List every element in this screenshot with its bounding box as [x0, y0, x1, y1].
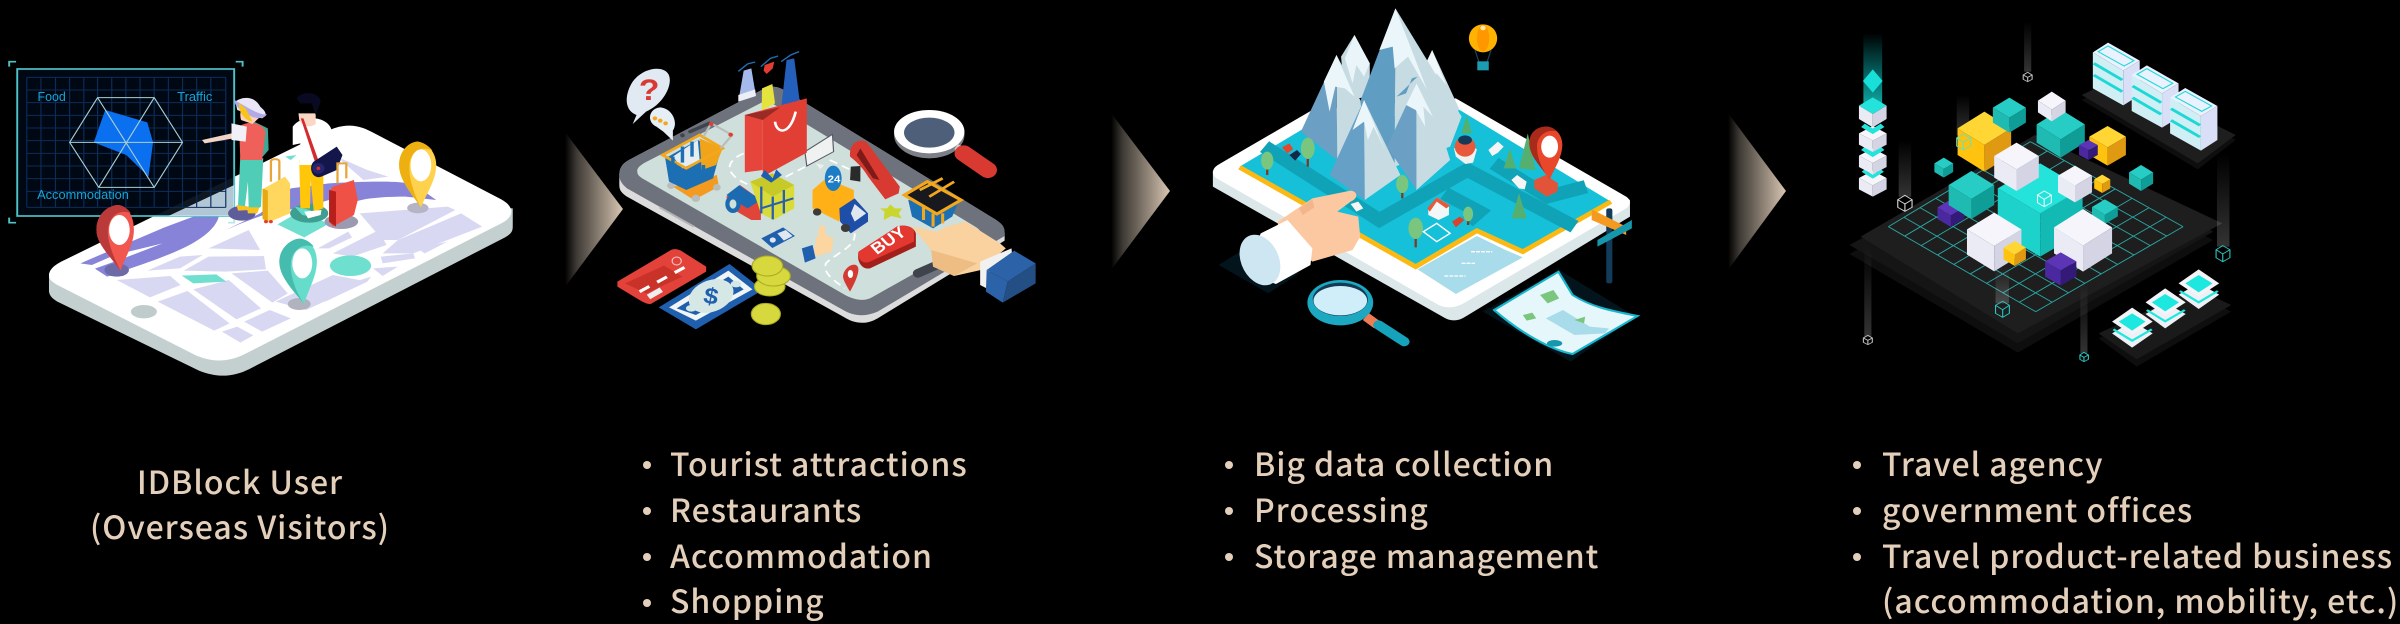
list: data handling	[1225, 440, 1599, 578]
monitor	[805, 134, 834, 169]
location pin and shop	[1529, 127, 1562, 197]
credit card	[617, 249, 706, 304]
delivery truck: 24	[828, 174, 840, 185]
front mountain	[1330, 100, 1400, 200]
label: Food: Food	[37, 90, 66, 104]
text: IDBlock User	[90, 458, 390, 549]
trees	[1261, 116, 1535, 247]
shelf: bottom platform	[2099, 288, 2231, 367]
water	[1418, 236, 1523, 294]
cube cluster	[1934, 92, 2153, 286]
basket	[904, 178, 961, 228]
suitcase: red	[324, 163, 358, 229]
radar chart	[70, 98, 183, 187]
map blocks	[117, 157, 482, 343]
speech bubble: dots	[650, 107, 675, 141]
list: places: Restaurants	[670, 486, 862, 532]
hand with sleeve	[1233, 191, 1360, 290]
magnifier	[1307, 280, 1404, 342]
illustration: tablet with mountain island	[1213, 8, 1638, 362]
left mountain	[1301, 55, 1368, 160]
river	[80, 207, 219, 277]
phone body	[619, 87, 1005, 323]
list: places: Accommodation	[670, 532, 933, 578]
illustration: shopping phone	[617, 52, 1036, 329]
list: data handling: Big data collection	[1254, 440, 1554, 486]
traveller: woman	[202, 98, 269, 221]
banknote	[659, 264, 763, 329]
roads	[1265, 147, 1586, 227]
dashed route	[730, 153, 855, 288]
shelf: servers platform	[2082, 77, 2236, 169]
storage units	[2112, 269, 2219, 348]
grid	[1888, 142, 2183, 312]
list: data consumers: Travel agency	[1882, 440, 2104, 486]
gift box	[750, 169, 794, 220]
right front mountain	[1387, 83, 1450, 190]
shadows	[1219, 248, 1636, 362]
speech bubble: question	[627, 69, 670, 124]
list: places: Tourist attractions	[670, 440, 968, 486]
text: IDBlock User: (Overseas Visitors)	[90, 503, 390, 549]
big mountain	[1349, 8, 1462, 167]
illustration: phone map with travellers	[9, 62, 513, 376]
main platform	[1850, 135, 2222, 353]
teal screen	[1240, 110, 1611, 268]
pin: yellow	[399, 142, 436, 213]
BUY button: BUY	[866, 222, 910, 258]
stacked blocks	[1859, 97, 1887, 197]
pin: red	[96, 205, 134, 277]
buildings and cars	[1282, 135, 1527, 242]
speech bubble: question: ?	[639, 73, 659, 107]
thumb up icon	[802, 225, 834, 263]
arrow 3	[1728, 113, 1786, 270]
high heel	[850, 141, 900, 199]
pointing hand	[912, 222, 1036, 303]
back mountains	[1341, 35, 1460, 117]
teal map shapes	[182, 155, 371, 283]
shopping bag	[745, 84, 807, 177]
media card	[761, 227, 795, 248]
list: places	[643, 440, 968, 623]
list: data handling: Storage management	[1254, 532, 1599, 578]
servers	[2093, 43, 2217, 151]
tablet body	[1213, 98, 1630, 320]
flag signpost	[1592, 208, 1632, 283]
phone body	[49, 126, 513, 376]
magnifier	[894, 110, 988, 170]
radar panel	[9, 62, 243, 223]
light beams	[1863, 22, 2229, 353]
list: data consumers	[1853, 440, 2399, 623]
yellow dress	[762, 84, 775, 111]
pin	[843, 265, 858, 292]
list: data consumers: government offices	[1882, 486, 2193, 532]
label: Traffic: Traffic	[177, 90, 213, 104]
label: Accommodation: Accommodation	[37, 188, 129, 202]
list: data consumers: (accommodation, mobility, etc.)	[1882, 577, 2399, 623]
arrow 2	[1111, 113, 1170, 270]
list: data handling: Processing	[1254, 486, 1429, 532]
paper map	[1494, 272, 1638, 354]
pin: teal	[279, 239, 317, 310]
list: places: Shopping	[670, 577, 825, 623]
list: data consumers: Travel product-related business	[1882, 532, 2393, 578]
delivery truck	[813, 166, 868, 233]
banknote: $	[701, 283, 721, 310]
suitcase: yellow	[262, 159, 290, 223]
diamond token	[1863, 69, 1883, 93]
camera	[725, 185, 761, 220]
shopping cart	[663, 122, 733, 202]
BUY button	[858, 222, 916, 269]
arrow 1	[565, 132, 623, 287]
text: IDBlock User: IDBlock User	[137, 458, 343, 504]
shore line	[1240, 167, 1611, 267]
wireframe cubes	[1863, 72, 2230, 362]
star	[880, 204, 902, 220]
hanging clothes	[738, 52, 800, 108]
traveller: man	[290, 93, 342, 223]
illustration: data cubes platform	[1850, 22, 2236, 367]
coins	[751, 256, 790, 325]
balloon	[1469, 24, 1497, 70]
